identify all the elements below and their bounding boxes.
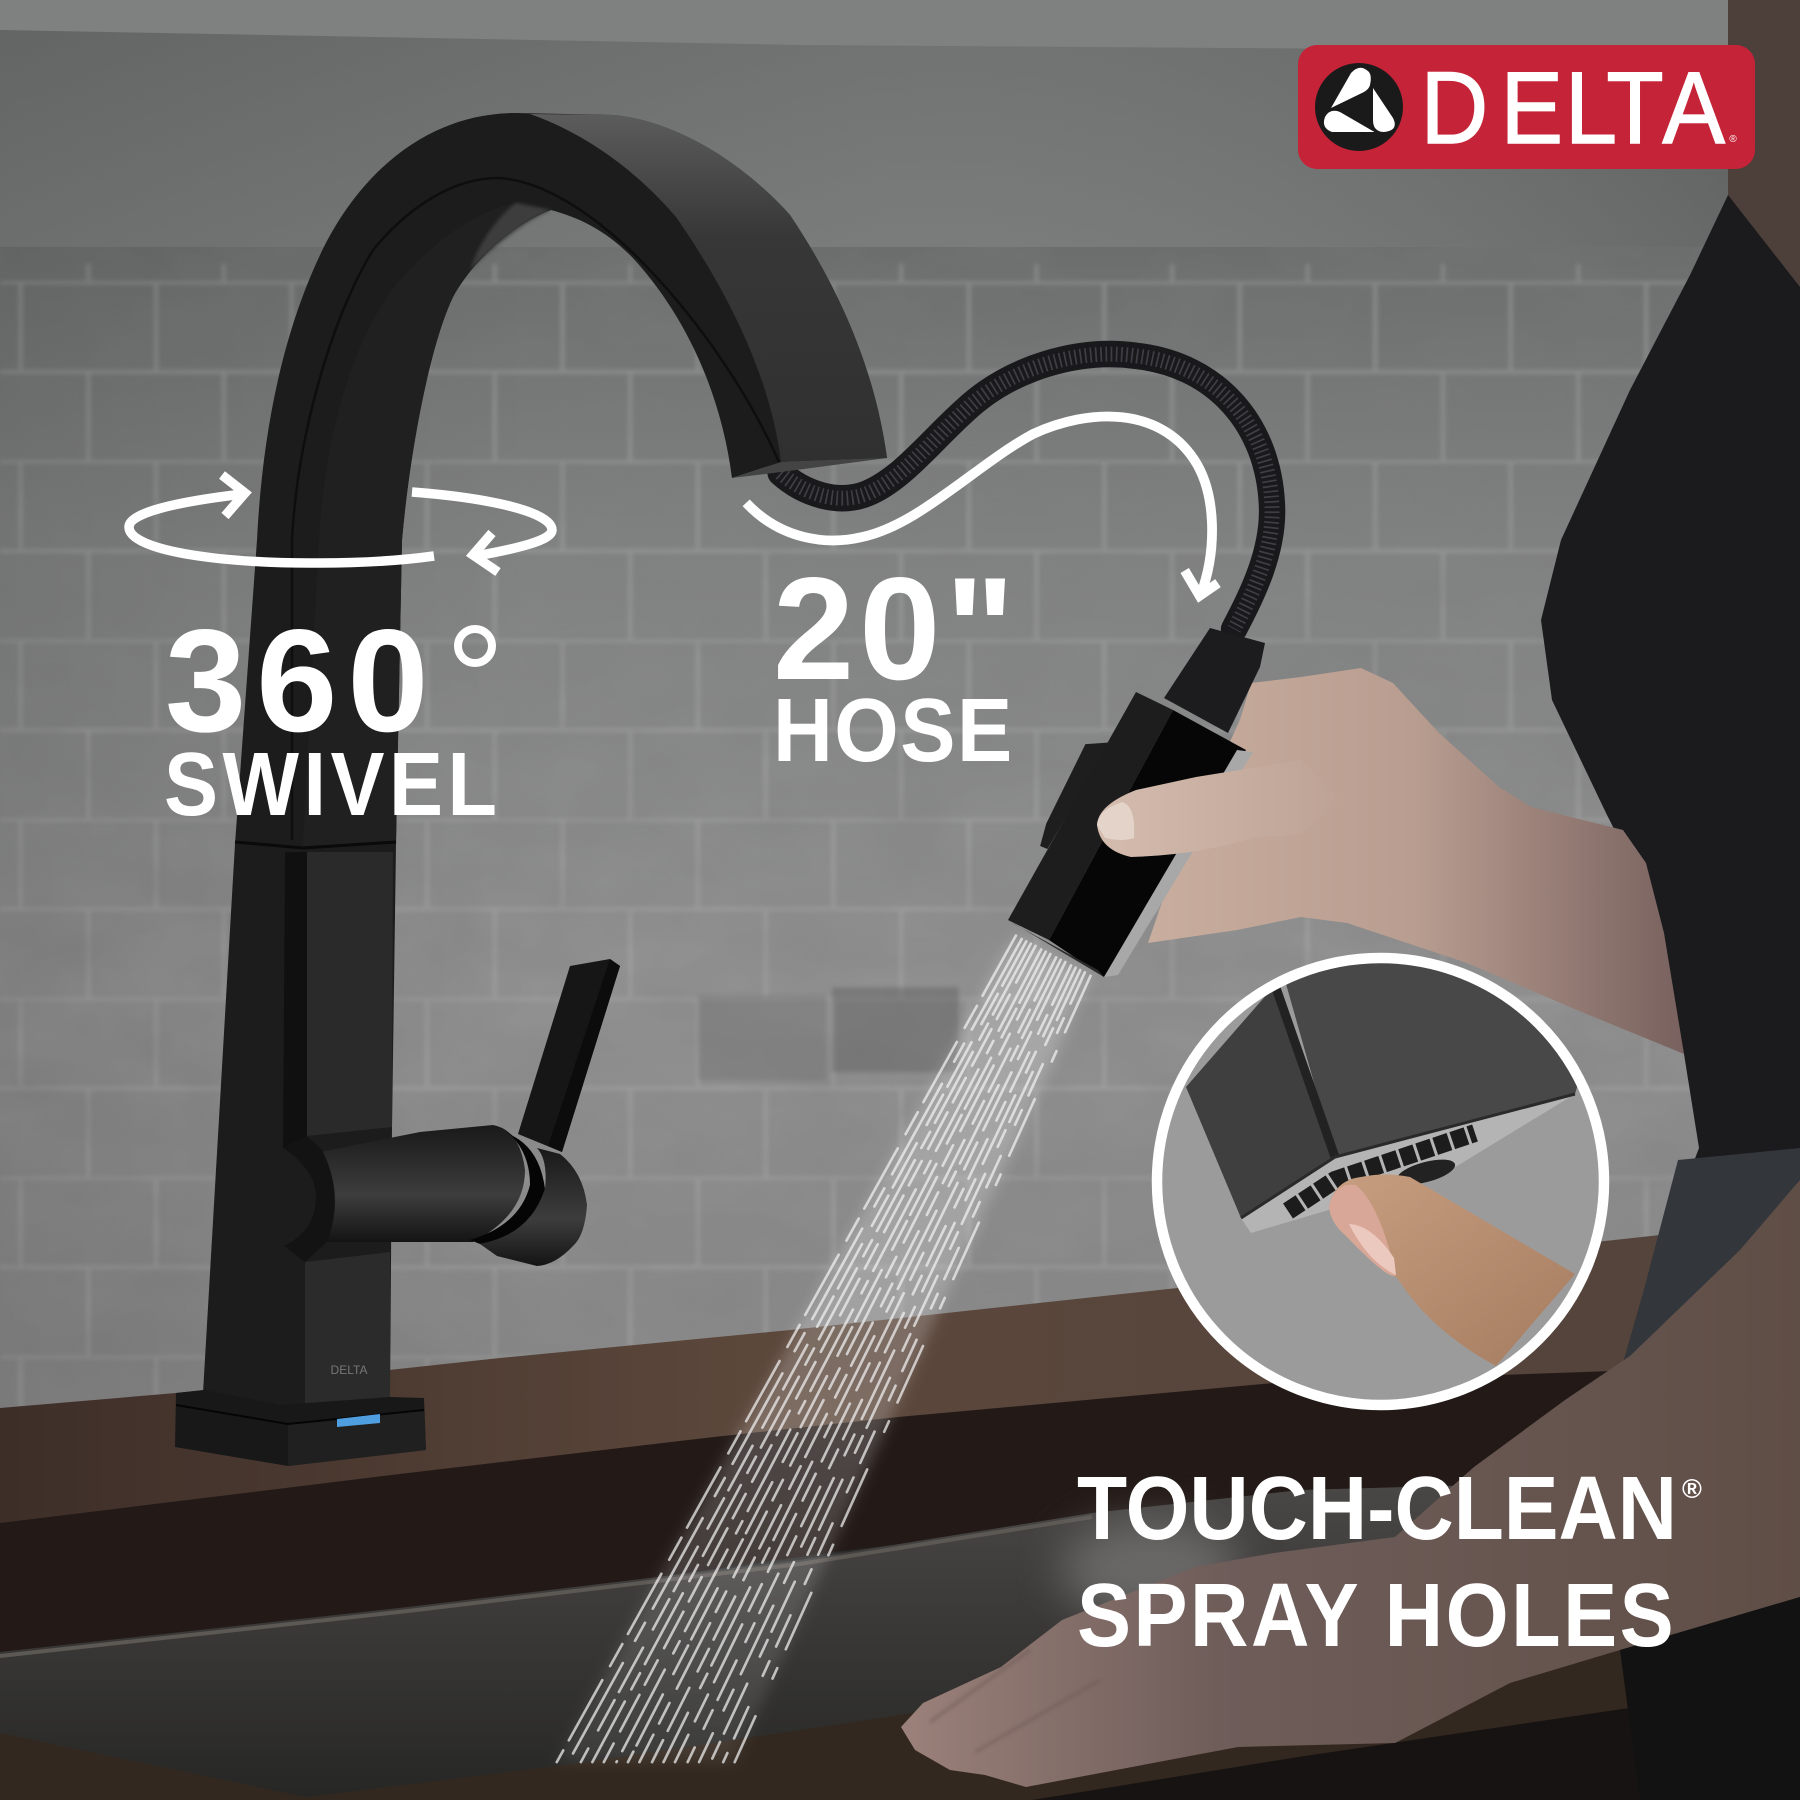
dark cabinet corner [1032, 1708, 1640, 1800]
spray holes [1288, 1133, 1475, 1211]
shoulder skin [1728, 0, 1800, 330]
inset white ring [1157, 958, 1604, 1405]
rotation arrows [129, 475, 552, 572]
sink basin [0, 1480, 1660, 1800]
fingertip [1329, 1185, 1396, 1276]
blue LED [337, 1414, 380, 1427]
finger gaps [930, 1650, 1100, 1752]
sink reflection [1060, 1520, 1240, 1620]
neck seam [235, 842, 396, 848]
thumbnail [1097, 802, 1134, 840]
logo wordmark: DELTA [1420, 50, 1726, 165]
spout grooves [292, 178, 779, 840]
spray holes label: SPRAY HOLES [1077, 1565, 1674, 1666]
handle barrel [320, 1125, 525, 1242]
spray head side button [1044, 747, 1102, 847]
nozzle close-up [1186, 963, 1577, 1366]
degree symbol [458, 629, 492, 663]
callout: 20 inch hose [746, 417, 1218, 781]
spout underside highlight [470, 203, 551, 270]
lower hand and forearm [901, 1180, 1800, 1787]
spout mouth [732, 458, 887, 478]
hose label: HOSE [773, 681, 1012, 781]
logo emblem [1315, 63, 1403, 151]
tiled marble wall [0, 247, 1800, 1467]
handle black ring [470, 1130, 545, 1244]
photo: water spray [557, 936, 1091, 1762]
spray streams [557, 936, 1091, 1762]
touch-clean label: TOUCH-CLEAN [1077, 1459, 1677, 1559]
spray head main face [1049, 710, 1246, 977]
red badge [1298, 45, 1755, 169]
photo: woman and arms [901, 0, 1800, 1800]
registered mark: ® [1729, 134, 1737, 145]
upper hand holding spray [1148, 668, 1684, 1054]
spray head silver edge [1104, 750, 1253, 977]
neck inner face [303, 203, 551, 846]
spray head left face [1008, 692, 1173, 940]
inset: touch-clean spray holes circle [1156, 945, 1620, 1406]
swivel label: SWIVEL [164, 734, 497, 835]
handle hub [283, 1136, 335, 1262]
20 inch figure: 20" [773, 547, 1020, 710]
registered mark: ® [1682, 1474, 1702, 1504]
hose [781, 354, 1272, 629]
handle cap [480, 1148, 587, 1266]
dark top [1541, 195, 1800, 1378]
base seam [176, 1405, 424, 1424]
upper cabinet band [0, 0, 1800, 300]
spray head neck [1164, 628, 1265, 733]
counter front face [0, 1370, 1640, 1658]
inset background [1156, 958, 1604, 1406]
spray mist [557, 936, 1091, 1762]
lower wood ledge [0, 1650, 1640, 1800]
faucet base [175, 1390, 426, 1466]
base right face [288, 1410, 426, 1466]
spray outlet [1008, 920, 1104, 977]
finger pressing spray holes [1329, 1174, 1575, 1366]
photo: faucet [175, 113, 1272, 1466]
sink rim highlight [0, 1517, 1092, 1656]
spout outer face [530, 114, 887, 462]
faucet DELTA mark: DELTA [331, 1363, 367, 1377]
lower body faces [283, 852, 307, 1148]
callout: touch-clean spray holes [1077, 1459, 1702, 1666]
photo: spray head [1008, 628, 1340, 977]
gooseneck spout and body silhouette [203, 113, 887, 1405]
Delta logo badge [1298, 45, 1755, 169]
handle lever [518, 959, 620, 1152]
hose length arrow [746, 417, 1218, 596]
thumb over spray head [1097, 760, 1340, 857]
wood countertop [0, 1235, 1660, 1530]
dark clothing lower right [1620, 1597, 1800, 1800]
fingernail [1349, 1224, 1396, 1275]
lower fabric fold [1624, 1148, 1800, 1366]
callout: 360 swivel [129, 475, 552, 835]
360 figure: 360 [165, 599, 439, 762]
